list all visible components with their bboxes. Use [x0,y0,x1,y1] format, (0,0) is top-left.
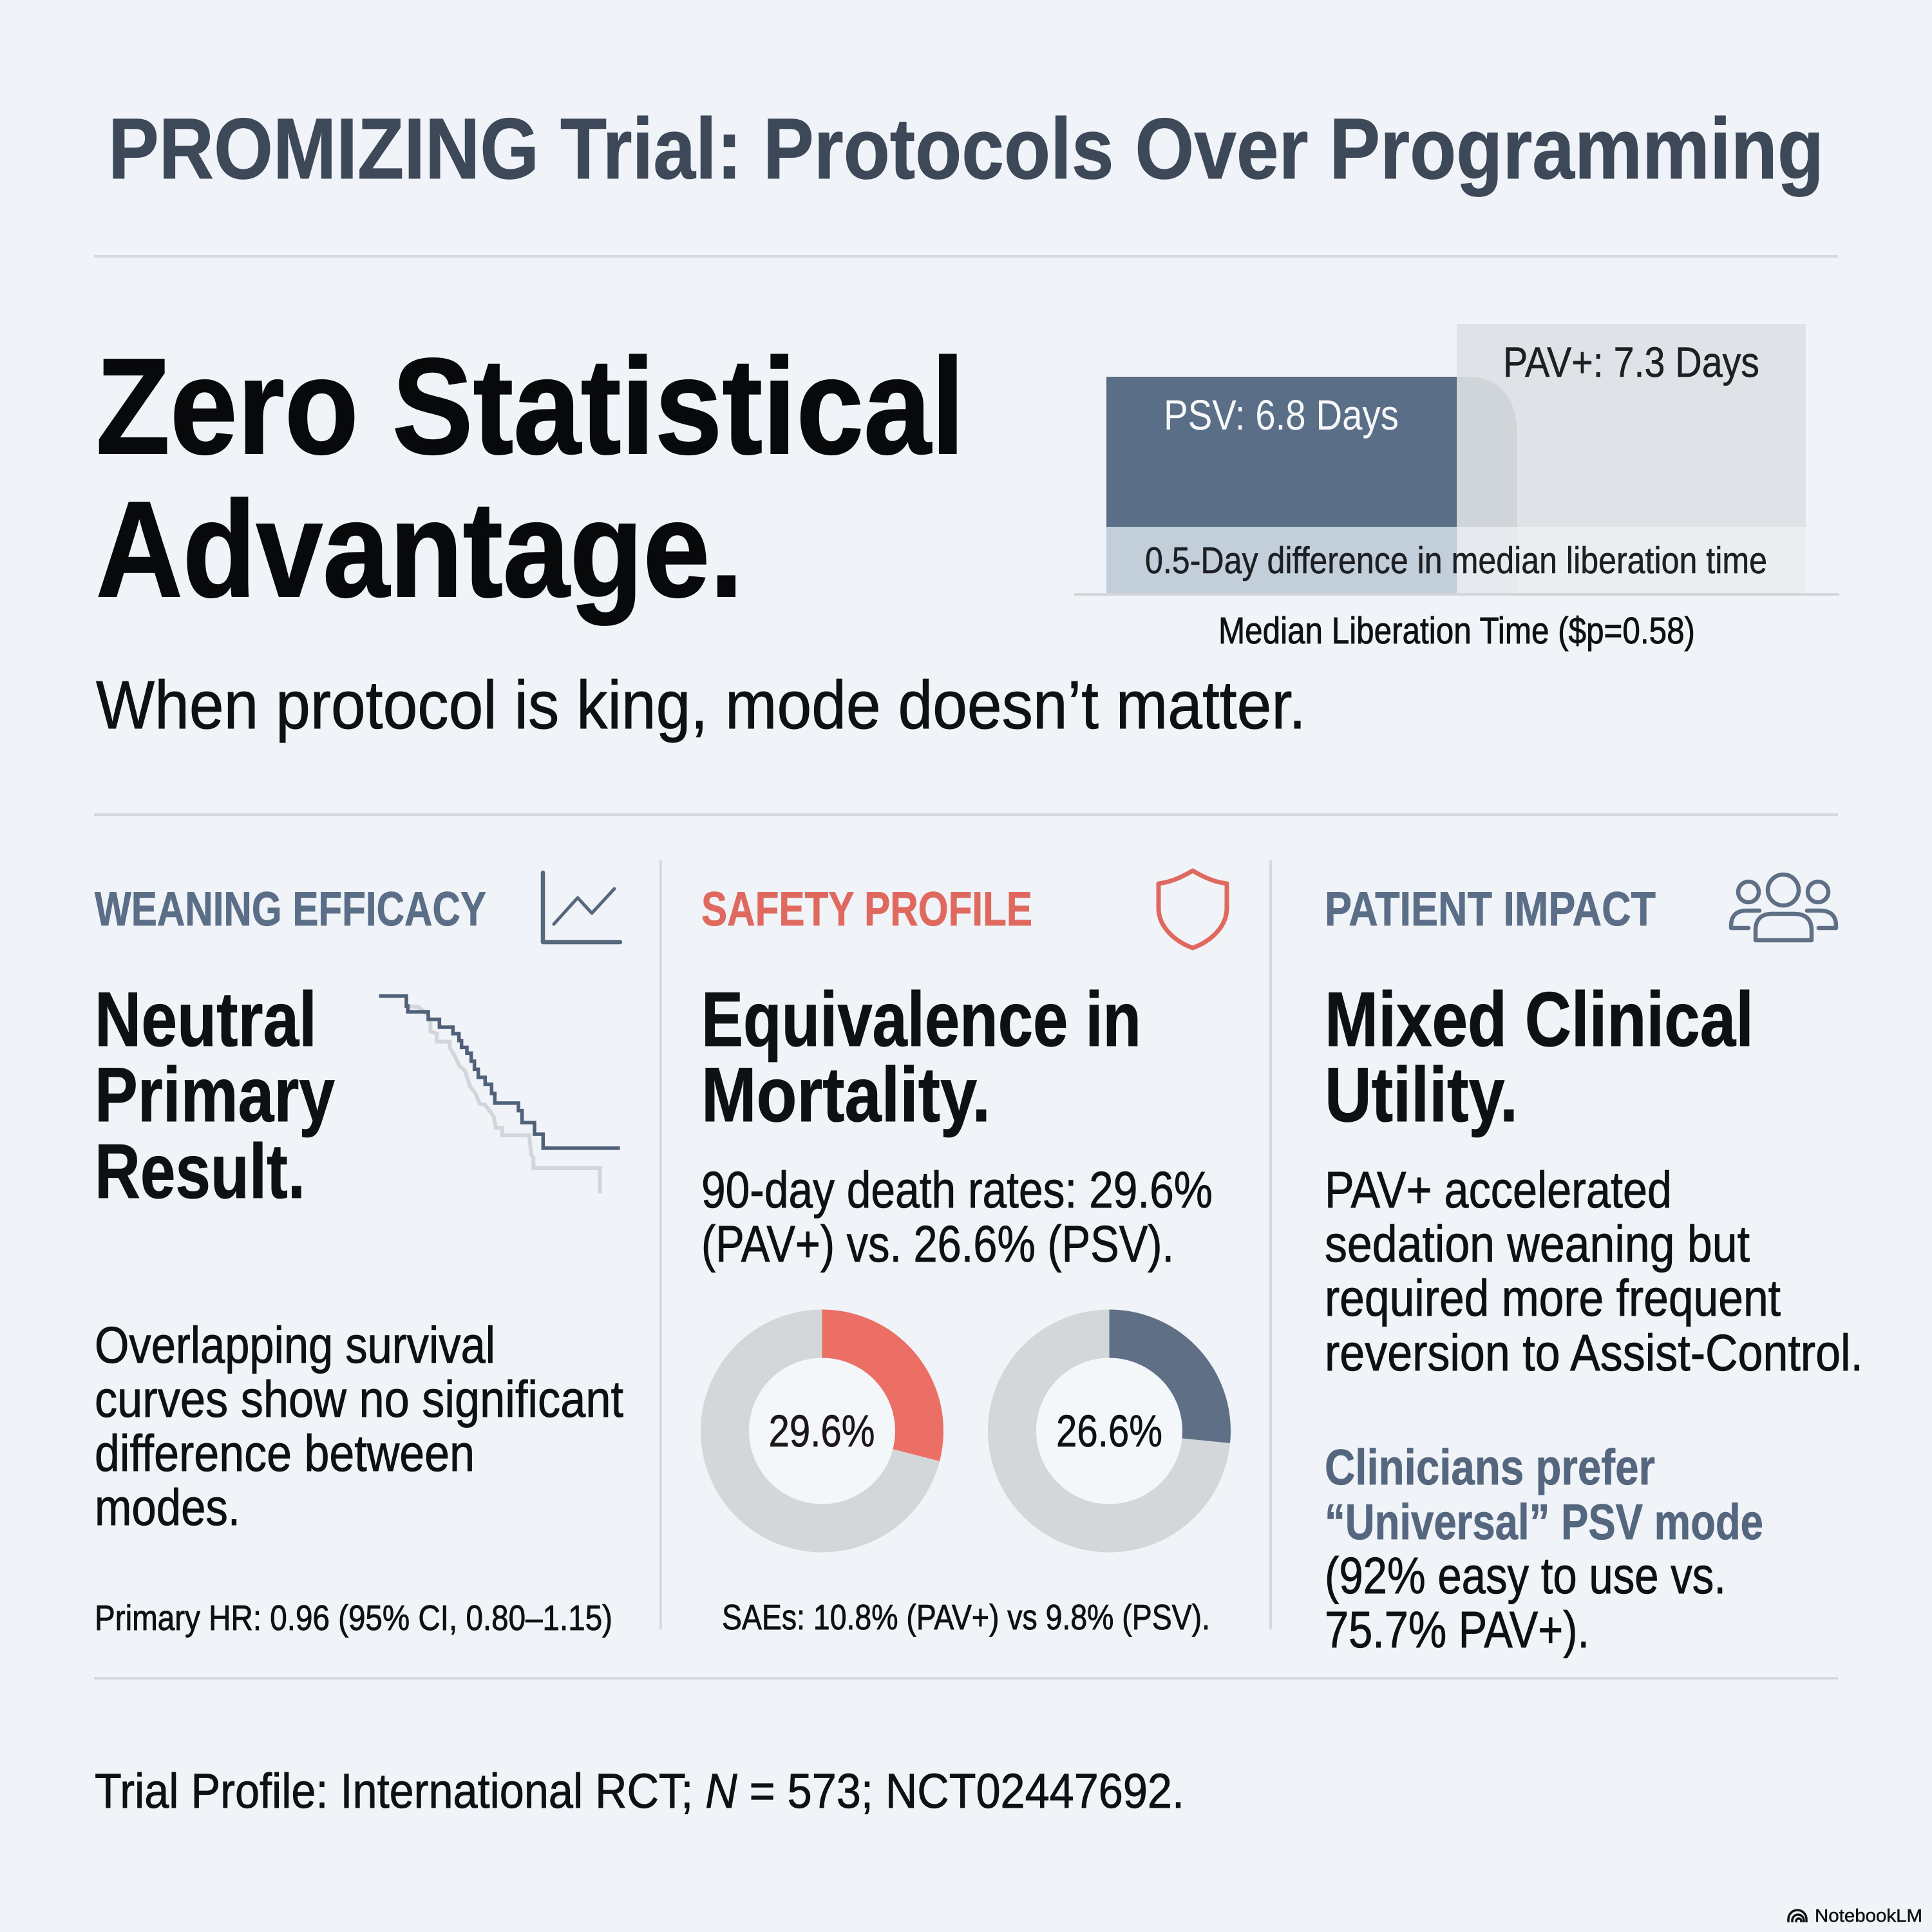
heading [701,976,1141,1138]
label: difference: 0.5-Day difference in median liberation time [1145,540,1767,582]
donut: PSV death rate: 26.6% [1056,1406,1162,1456]
body text: PAV+ accelerated [1325,1161,1672,1218]
heading: Mixed Clinical [1325,976,1754,1063]
donut: PSV death rate [1012,1334,1207,1528]
heading: Utility. [1325,1052,1518,1138]
body text [95,1316,623,1536]
label: PAV+ value: PAV+: 7.3 Days [1503,338,1759,386]
callout: clinician preference [1325,1439,1763,1658]
section label: WEANING EFFICACY [95,882,486,936]
bar chart: median liberation time [1074,324,1839,652]
body text: curves show no significant [95,1370,623,1428]
icon: people [1731,875,1836,940]
section label: PATIENT IMPACT [1325,882,1656,936]
callout: clinician preference: Clinicians prefer [1325,1439,1655,1495]
body text: sedation weaning but [1325,1215,1750,1273]
body text [701,1161,1213,1273]
subheadline: When protocol is king, mode doesn’t matter. [96,667,1306,743]
callout: clinician preference: (92% easy to use vs. [1325,1547,1726,1604]
callout: clinician preference: “Universal” PSV mode [1325,1493,1763,1550]
footer: trial profile: Trial Profile: International RCT; N = 573; NCT02447692. [95,1764,1184,1819]
heading: Equivalence in [701,976,1141,1063]
survival curves [379,996,620,1193]
label: PSV value: PSV: 6.8 Days [1164,391,1399,439]
donut: PAV+ death rate: 29.6% [769,1406,875,1456]
body text: reversion to Assist-Control. [1325,1324,1863,1381]
headline: Zero Statistical [96,330,965,482]
bar: PAV+ [1457,324,1806,594]
donut: PAV+ death rate [725,1334,920,1528]
bar: PSV [1106,377,1517,594]
heading: Mortality. [701,1052,990,1138]
icon: line chart [543,873,620,942]
icon: shield [1159,871,1227,948]
panel: weaning efficacy [95,873,623,1638]
heading: Primary [95,1052,335,1138]
body text [1325,1161,1863,1381]
callout: clinician preference: 75.7% PAV+). [1325,1601,1589,1658]
heading [95,976,335,1215]
heading: Result. [95,1128,305,1215]
body text: modes. [95,1479,240,1536]
body text: (PAV+) vs. 26.6% (PSV). [701,1215,1174,1273]
body text: difference between [95,1425,475,1482]
axis caption: Median Liberation Time ($p=0.58) [1218,610,1695,652]
footnote: hazard ratio: Primary HR: 0.96 (95% CI, 0.80–1.15) [95,1598,612,1638]
body text: Overlapping survival [95,1316,495,1374]
body text: 90-day death rates: 29.6% [701,1161,1213,1218]
headline: Advantage. [96,473,743,625]
panel: safety profile [701,871,1227,1637]
heading [1325,976,1754,1138]
watermark: NotebookLM: NotebookLM [1815,1906,1922,1926]
headline [96,330,965,625]
footnote: serious adverse events: SAEs: 10.8% (PAV+) vs 9.8% (PSV). [722,1597,1210,1637]
heading: Neutral [95,976,317,1063]
body text: required more frequent [1325,1269,1781,1327]
section label: SAFETY PROFILE [701,882,1032,936]
panel: patient impact [1325,875,1863,1658]
